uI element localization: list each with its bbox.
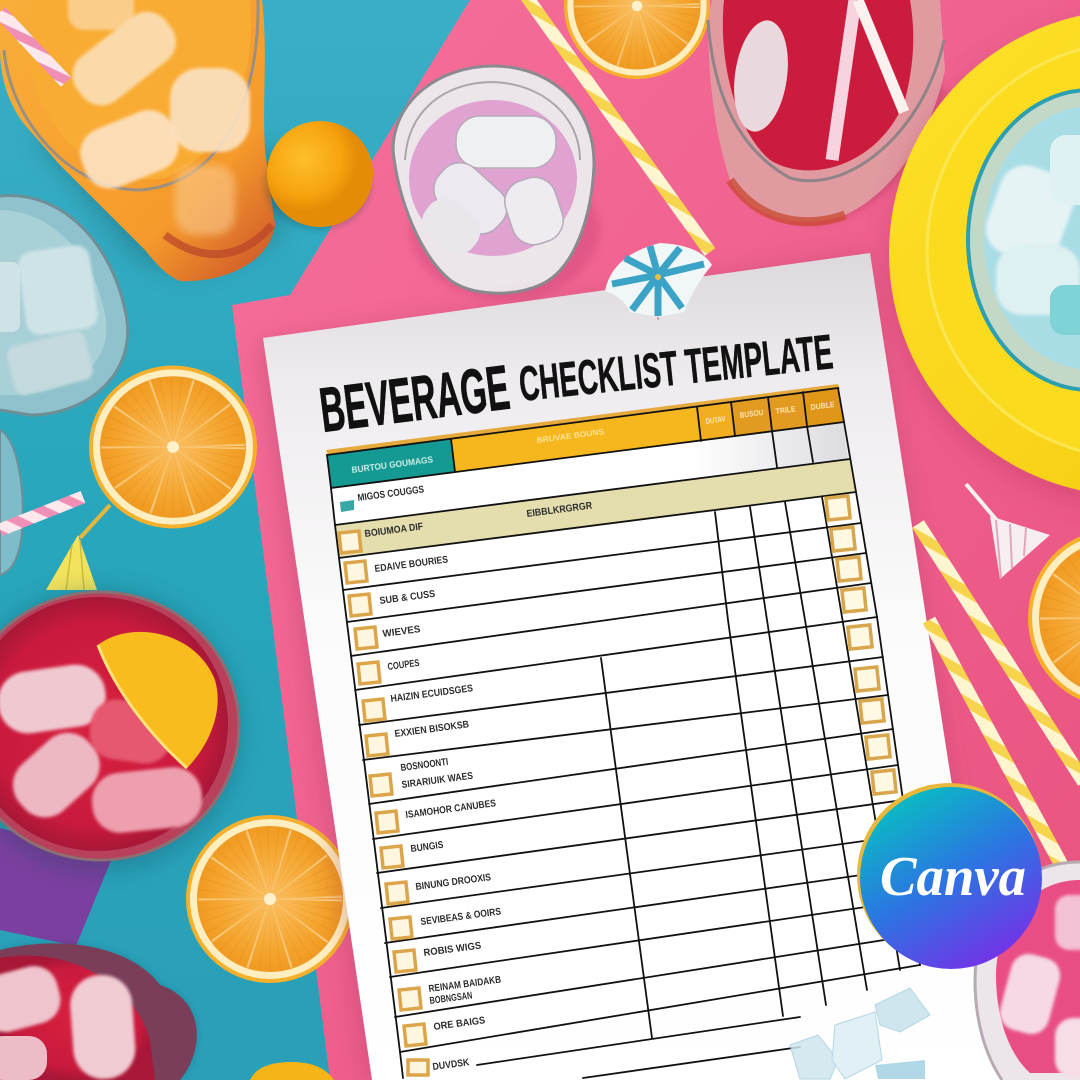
clear glass with pink drink, top centre [393,66,600,300]
table: row labels: EIBBLKRGRGR [526,500,594,520]
table: orange header cells [697,388,843,441]
table: khaki section row [335,459,856,558]
lemon, top centre left [266,121,373,229]
table: row labels: WIEVES [382,624,421,640]
table: header labels: DUBLE [810,400,836,412]
table: row labels: SIRARIUIK WAES [401,771,474,791]
title: BEVERAGE [316,353,513,446]
table: row labels: SEVIBEAS & OOIRS [420,906,502,928]
orange slice, left [89,366,257,528]
table: header labels: BUSOU [739,408,764,420]
Canva logo badge: Canva [880,846,1026,908]
teal water glass on plate [968,90,1080,390]
background: pink paper sheet [232,0,1080,1080]
Canva logo badge [857,783,1042,969]
red drink glass with lemon wedge, left [0,590,240,870]
white paper fan umbrella, right [966,484,1050,579]
orange slice, top [564,0,710,79]
table: header labels [351,400,836,475]
table: row labels: EXXIEN BISOKSB [394,719,470,740]
yellow plate, right [887,10,1080,505]
yellow striped straw, top centre [526,0,710,252]
blue and white paper umbrella [605,243,712,320]
yellow striped straw, right upper [918,524,1080,782]
table: teal row icon [340,500,354,512]
checklist table [326,384,920,1078]
orange slice, lower left [186,815,354,983]
pink drink glass, bottom right [975,862,1080,1080]
yellow striped straw, right lower [929,620,1062,866]
orange drink glass, top left [0,0,285,281]
table: body rows [339,492,920,1052]
table: row labels: BOSNOONTI [400,757,449,774]
table: row labels: MIGOS COUGGS [357,484,425,504]
table: row labels: COUPES [387,658,420,673]
small glass at left edge [0,430,23,575]
table: row labels: BINUNG DROOXIS [415,872,492,893]
table: row rules [327,388,920,1078]
table: row labels: HAIZIN ECUIDSGES [390,683,474,705]
yellow cocktail umbrella [46,505,110,590]
table: row labels: EDAIVE BOURIES [374,554,449,575]
title [316,325,835,446]
red drink glass, bottom left [0,943,197,1080]
table: gold header edge [326,384,840,455]
table: row labels: ORE BAIGS [433,1015,486,1033]
table: row labels: REINAM BAIDAKB [428,975,502,995]
orange slice, right edge [1028,530,1080,706]
ice cubes on the table [790,988,930,1079]
table: row labels: DUVDSK [432,1057,471,1073]
title: CHECKLIST TEMPLATE [517,325,835,412]
table: row labels: BOIUMOA DIF [364,521,424,540]
table: white first row [331,422,848,525]
table: right checkboxes [826,496,896,794]
table: header labels: DUTAV [705,414,727,426]
table: row labels: ROBIS WIGS [423,940,482,959]
table: row labels: BOBNGSAN [429,990,473,1007]
table: header labels: BURTOU GOUMAGS [351,454,434,475]
lemon, bottom edge [250,1062,334,1080]
table: row labels: ISAMOHOR CANUBES [405,798,497,821]
background: purple wedge [0,828,112,946]
table: left checkboxes [339,531,428,1075]
clear water glass, left [0,196,128,415]
pink striped straw, left [0,497,83,530]
table: row labels: SUB & CUSS [379,589,436,607]
table: row labels: BUNGIS [410,840,444,855]
red drink glass with straws, top right [708,0,945,223]
table: teal header cell [327,439,455,488]
table: yellow header cell [451,407,701,472]
table: row labels [357,484,594,1073]
table: header labels: TRILE [775,404,797,416]
table: header labels: BRUVAE BOUNS [536,427,605,445]
paper checklist sheet [257,253,1000,1080]
